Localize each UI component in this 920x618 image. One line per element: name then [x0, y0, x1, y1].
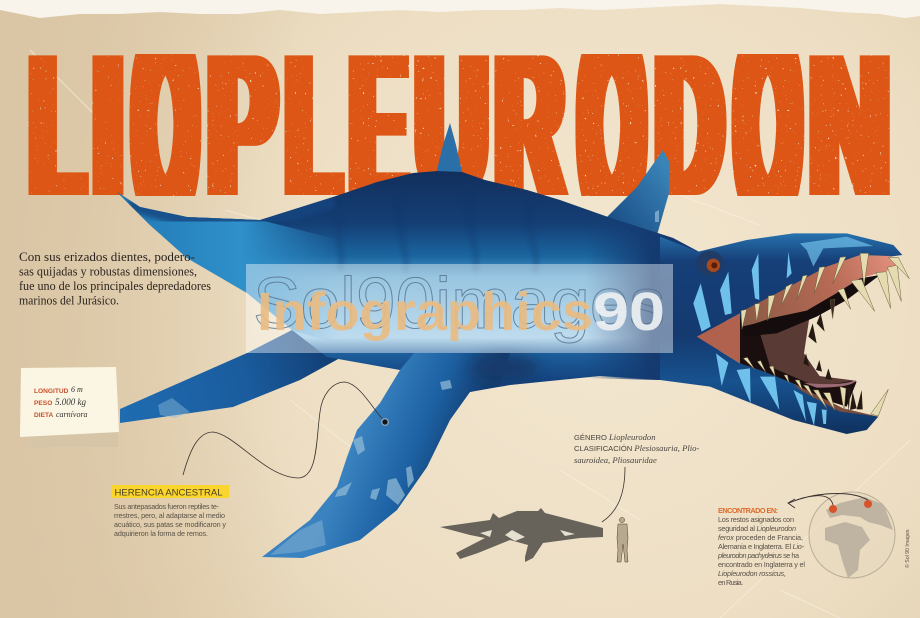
gum [742, 255, 902, 327]
rear lower teeth [803, 313, 863, 412]
head [660, 233, 909, 434]
locations [829, 505, 837, 513]
heritage text: adquirieron la forma de remos. [114, 529, 208, 538]
classification notes: CLASIFICACIÓN Plesiosauria, Plio- [574, 443, 699, 453]
found-in text: seguridad al Liopleurodon [718, 524, 796, 533]
flipper markings [158, 210, 659, 555]
found-in text: encontrado en Inglaterra y el [718, 560, 805, 569]
title: I [94, 12, 122, 239]
title: D [656, 12, 722, 239]
title: L [31, 13, 84, 239]
data card: DIETA [34, 412, 54, 419]
intro text [19, 250, 211, 308]
heritage text: Sus antepasados fueron reptiles te- [114, 502, 220, 511]
title [28, 54, 890, 196]
classification notes [574, 432, 699, 465]
upper tail shadow [130, 197, 333, 220]
found-in text: Los restos asignados con [718, 515, 794, 524]
tongue [803, 380, 856, 388]
scale leader [602, 467, 625, 522]
title: L [287, 13, 340, 239]
intro text: Con sus erizados dientes, podero- [19, 250, 195, 264]
intro text: fue uno de los principales depredadores [19, 279, 211, 293]
found-in text [717, 506, 805, 587]
found-in text: pleurodon pachydeirus se ha [717, 551, 800, 560]
gullet [740, 310, 857, 407]
neck shading [585, 209, 730, 380]
title: R [496, 12, 563, 239]
watermark: Infographics [257, 282, 593, 342]
title: P [209, 11, 276, 238]
classification notes: sauroidea, Pliosauridae [574, 455, 657, 465]
intro text: marinos del Jurásico. [19, 294, 119, 308]
intro text: sas quijadas y robustas dimensiones, [19, 264, 197, 278]
watermark: Sol90images [253, 264, 665, 344]
body streaks [339, 195, 536, 272]
data card [20, 367, 119, 447]
found-in text: Liopleurodon rossicus, [718, 569, 786, 578]
liopleurodon illustration [117, 123, 909, 558]
rear dorsal fin [606, 150, 670, 235]
found-in text: ferox proceden de Francia, [718, 533, 803, 542]
credit: © Sol 90 Images [904, 529, 911, 568]
scale silhouette: human [617, 517, 628, 562]
data card: 6 m [71, 385, 83, 394]
watermark: 90 [593, 282, 665, 342]
upper jaw [660, 233, 902, 338]
leader line to flipper [183, 382, 389, 478]
scale silhouette: liopleurodon [440, 508, 603, 562]
data card: 5.000 kg [55, 397, 86, 407]
lip [697, 313, 740, 363]
front flipper [262, 353, 510, 558]
heritage text: rrestres, pero, al adaptarse al medio [114, 511, 225, 520]
lower jaw [660, 337, 878, 434]
globe [788, 492, 895, 578]
heritage text [114, 502, 226, 538]
classification notes: GÉNERO Liopleurodon [574, 432, 656, 442]
title: U [416, 12, 487, 238]
data card: LONGITUD [34, 388, 69, 395]
flipper shade [471, 354, 539, 382]
data card: carnívora [56, 410, 88, 419]
eye [696, 251, 724, 276]
land [825, 497, 893, 578]
title: N [810, 11, 889, 239]
lower gum [793, 383, 878, 417]
teeth [741, 253, 909, 416]
heritage heading: HERENCIA ANCESTRAL [114, 488, 222, 498]
heritage text: acuático, sus patas se modificaron y [114, 520, 226, 529]
main body [117, 171, 730, 392]
found-in text: Alemania e Inglaterra. El Lio- [718, 542, 805, 551]
lower stripes [716, 353, 827, 426]
tail tint [117, 192, 340, 345]
arrows [788, 494, 868, 508]
found-in text: ENCONTRADO EN: [718, 506, 778, 515]
rear flipper [120, 330, 340, 423]
dorsal fin [436, 123, 463, 176]
upper stripes [693, 237, 873, 332]
found-in text: en Rusia. [718, 578, 743, 587]
title: E [351, 11, 406, 238]
data card: PESO [34, 400, 52, 407]
